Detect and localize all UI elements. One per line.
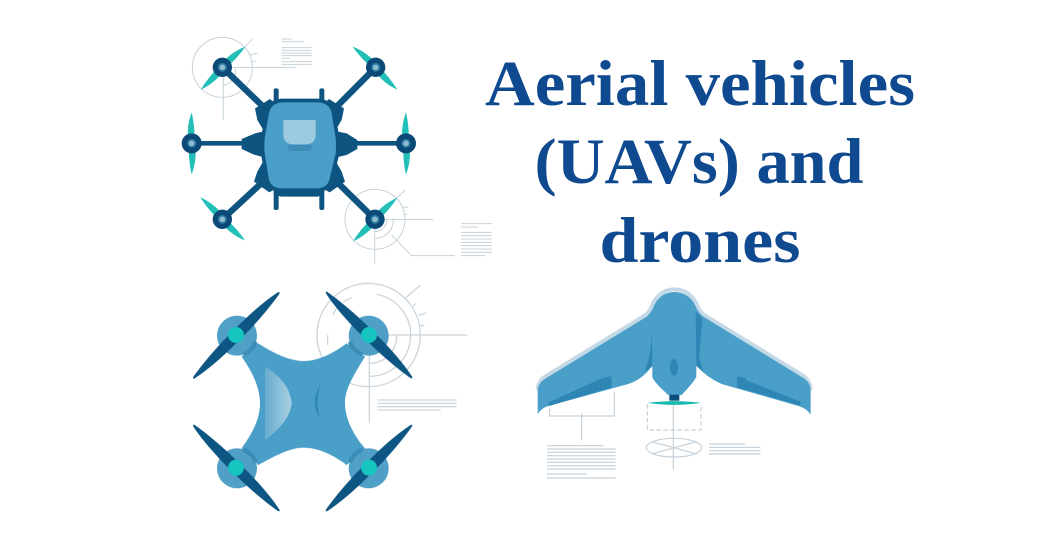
body shell bbox=[264, 102, 336, 188]
rotor blades bbox=[188, 44, 410, 244]
fuselage frame bbox=[242, 88, 357, 210]
technical annotation lines: quadcopter bbox=[317, 283, 467, 423]
technical annotation lines: fixed-wing bbox=[547, 392, 760, 478]
title: drones bbox=[600, 205, 800, 277]
motor hubs bbox=[217, 316, 389, 488]
title: Aerial vehicles bbox=[485, 48, 915, 120]
propeller blades bbox=[189, 288, 416, 515]
body bbox=[242, 343, 365, 465]
wing control surfaces bbox=[548, 312, 800, 406]
body hatch bbox=[283, 120, 316, 144]
hub shadow arcs bbox=[243, 342, 362, 462]
fixed-wing drone bbox=[538, 289, 811, 478]
hexacopter drone bbox=[182, 37, 492, 263]
quadcopter drone bbox=[189, 283, 467, 515]
propeller mount bbox=[669, 395, 679, 401]
propeller bbox=[648, 401, 701, 405]
arms bbox=[192, 67, 406, 219]
title bbox=[485, 48, 915, 277]
technical annotation lines: hexacopter bbox=[192, 37, 492, 263]
motor hubs bbox=[182, 58, 416, 229]
wing leading edge highlight bbox=[538, 289, 811, 390]
wings and fuselage bbox=[538, 292, 811, 415]
title: (UAVs) and bbox=[534, 126, 864, 198]
rotor caps bbox=[228, 327, 377, 476]
centre sensor arc bbox=[315, 385, 320, 418]
mesh panel bbox=[265, 367, 292, 440]
